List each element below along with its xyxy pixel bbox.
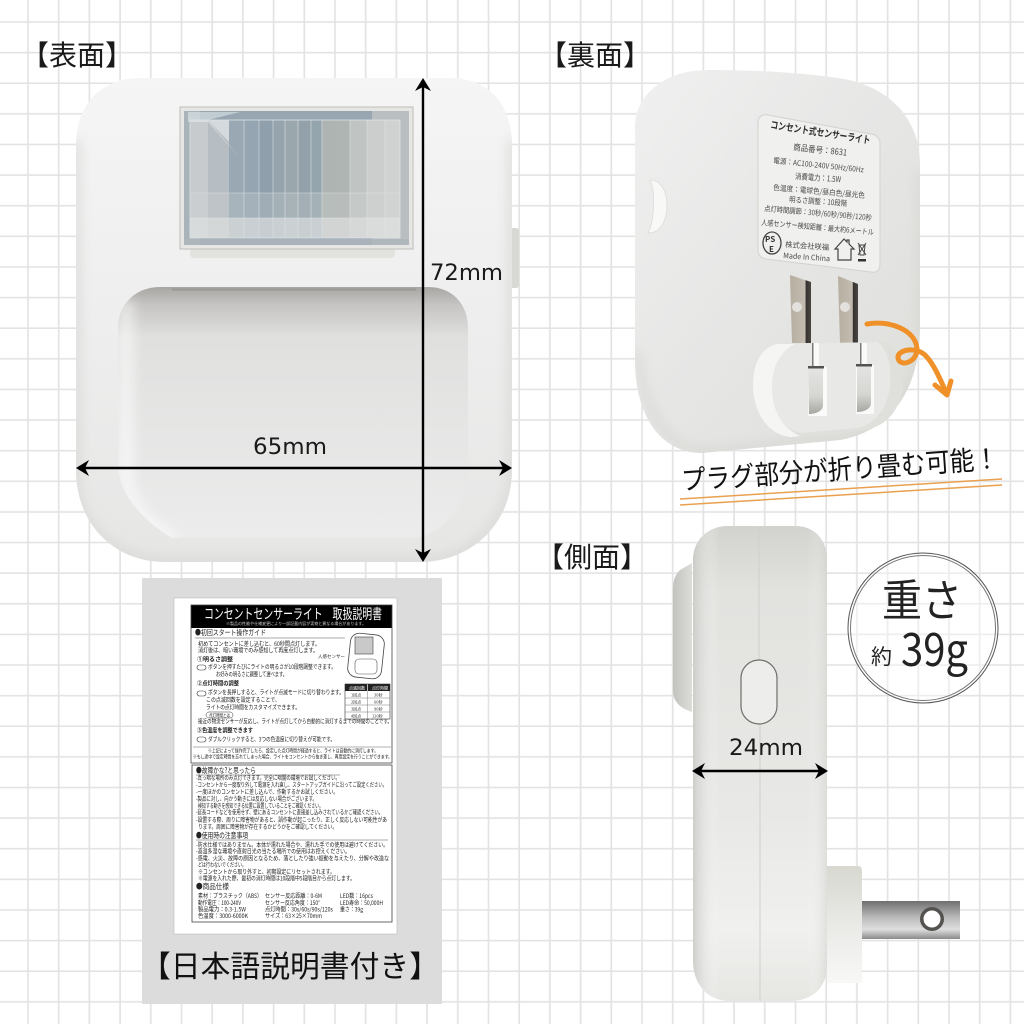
spec label: 株式会社咲福: [785, 239, 830, 253]
icon: crossed-out bin: [858, 243, 866, 262]
arrow: plug folds: [867, 323, 951, 395]
panel: back view of sensor light: [635, 70, 951, 454]
manual timing table: 120秒: [372, 712, 383, 720]
manual timing table: 点灯時間: [372, 684, 388, 692]
manual paper: [174, 598, 397, 934]
manual quick-start section: この点滅回数を設定することで、: [206, 695, 280, 704]
sensor bump: [673, 563, 692, 712]
manual troubleshooting and cautions: -防水仕様ではありません。本体が濡れた場合や、濡れた手での使用は避けてください。: [196, 840, 388, 849]
callout: weight badge: 約: [871, 641, 892, 671]
panel: side view of sensor light: [673, 526, 960, 1001]
manual troubleshooting and cautions: [192, 765, 392, 922]
dimension arrow: 65mm width: [76, 460, 512, 476]
manual troubleshooting and cautions: -延長コードなどを使用せず、壁にあるコンセントに直接差し込みされているかご確認ください。: [196, 808, 383, 816]
manual timing table: 1回点: [351, 692, 361, 698]
spec label: 消費電力：1.5W: [795, 171, 841, 185]
manual troubleshooting and cautions: 点灯時間：30s/60s/90s/120s: [265, 904, 333, 914]
dimension arrow: 72mm height: [415, 78, 431, 562]
manual caption: 【日本語説明書付き】: [141, 942, 439, 986]
manual timing table: 90秒: [374, 706, 382, 712]
heading: back: 【裏面】: [539, 34, 651, 74]
manual quick-start section: ボタンを長押しすると、ライトが点滅モードに切り替わります。: [208, 688, 344, 696]
manual troubleshooting and cautions: センサー反応角度：150°: [265, 898, 320, 907]
manual quick-start section: ライトの点灯時間をカスタマイズできます。: [206, 702, 300, 712]
manual timing table: 3回点: [351, 706, 361, 712]
manual quick-start section: ※もし途中で設定時間を忘れてしまった場合、ライトをコンセントから抜き差し、再度設定を行うことができます。: [193, 754, 392, 760]
icon: house: [835, 239, 854, 260]
plug pins: [790, 275, 858, 343]
callout: weight badge: [848, 553, 998, 703]
folding plug recess: [753, 342, 903, 437]
manual troubleshooting and cautions: -設置する際、周りに障害物があると、誤作動が起こったり、正しく反応しない可能性があ: [196, 815, 387, 824]
manual quick-start section: ボタンを押すたびにライトの明るさが10段階調整できます。: [208, 662, 336, 671]
label: 72mm: 72mm: [430, 261, 503, 286]
spec label: Made In China: [783, 250, 830, 264]
manual troubleshooting and cautions: LED寿命：50,000H: [340, 898, 383, 907]
manual troubleshooting and cautions: ●商品仕様: [196, 881, 229, 892]
manual troubleshooting and cautions: ●使用時の注意事項: [196, 830, 248, 841]
manual troubleshooting and cautions: 検知する動きを感知できる位置に設置していることをご確認ください。: [198, 801, 323, 810]
manual quick-start section: 点灯時間とは: [209, 712, 230, 719]
manual quick-start section: ②点灯時間の調整: [197, 678, 239, 688]
spec label: 点灯時間調節：30秒/60秒/90秒/120秒: [764, 203, 873, 223]
manual troubleshooting and cautions: ※電源を入れた際、最初の消灯時間は10段階中5段階目から点灯します。: [198, 874, 355, 882]
front recess: [118, 287, 468, 540]
manual troubleshooting and cautions: どは行わないでください。: [198, 860, 246, 869]
dimension arrow: 24mm: [692, 763, 828, 779]
manual troubleshooting and cautions: -コンセントから一度取り外して電源を入れ直し、スタートアップガイドに沿ってご設定ください。: [196, 780, 387, 789]
icon: PSE mark: E: [769, 244, 774, 255]
panel: Japanese manual: [141, 578, 442, 1004]
manual troubleshooting and cautions: 重さ：39g: [340, 904, 364, 914]
label: 65mm: 65mm: [253, 435, 327, 460]
callout: weight badge: 重さ: [882, 565, 962, 629]
side button on front view: [508, 228, 519, 288]
manual troubleshooting and cautions: LED数：16pcs: [340, 891, 373, 900]
callout: foldable plug: プラグ部分が折り畳む可能！: [680, 437, 1000, 498]
label: 24mm: 24mm: [729, 736, 803, 761]
back body: [635, 70, 920, 453]
spec label: コンセント式センサーライト: [770, 116, 872, 147]
manual troubleshooting and cautions: -真っ暗な場所のみ点灯できます。完全に暗闇の環境でお試しください。: [196, 773, 340, 782]
spec label: [758, 115, 880, 272]
manual troubleshooting and cautions: -感電、火災、故障の原因となるため、落としたり強い振動を与えたり、分解や改造な: [196, 854, 389, 862]
manual timing table: [345, 684, 390, 720]
icon: PSE mark: [763, 232, 781, 255]
manual troubleshooting and cautions: 色温度：3000-6000K: [198, 911, 248, 920]
manual troubleshooting and cautions: -一度ほかのコンセントに差し込んで、作動するかお試しください。: [196, 787, 338, 796]
heading: side: 【側面】: [536, 536, 648, 576]
manual timing table: 点滅回数: [349, 684, 365, 692]
manual troubleshooting and cautions: 素材：プラスチック（ABS）: [198, 891, 262, 900]
manual troubleshooting and cautions: サイズ：63×25×70mm: [265, 911, 322, 920]
manual timing table: 4回点: [351, 712, 361, 720]
manual quick-start section: ●初回スタート操作ガイド: [195, 627, 266, 638]
manual troubleshooting and cautions: ●故障かな?と思ったら: [196, 765, 256, 776]
manual quick-start section: 消灯後は、暗い環境でのみ感知して再度点灯します。: [198, 646, 318, 654]
manual grey backing: [142, 578, 442, 1004]
manual thumbnail: sensor light: [318, 632, 385, 680]
manual quick-start section: お好みの明るさに調整して選べます。: [216, 670, 287, 678]
manual troubleshooting and cautions: -製品に対し、向かう動きには反応しない場合がございます。: [196, 794, 317, 803]
manual troubleshooting and cautions: ※コンセントから取り外すと、初期設定にリセットされます。: [198, 867, 335, 876]
side button: [741, 660, 777, 724]
manual quick-start section: ③色温度を調整できます: [197, 726, 253, 734]
panel: front view of sensor light: [76, 78, 519, 562]
spec label: 電源：AC100-240V 50Hz/60Hz: [773, 155, 865, 176]
manual quick-start section: 接近の物流センサーが反応し、ライトが点灯してから自動的に消灯するまでの時間のことです。: [198, 716, 392, 726]
spec label: 商品番号：8631: [793, 141, 848, 159]
manual quick-start section: ①明るさ調整: [197, 654, 233, 664]
spec label: 人感センサー検知距離：最大約6メートル: [761, 217, 875, 238]
plug blade: [862, 901, 960, 939]
manual troubleshooting and cautions: 製品電力：0.3-1.5W: [198, 904, 247, 914]
manual quick-start section: ※上記によって操作完了したら、設定した点灯時間が経過すると、ライトは自動的に消灯します。: [208, 748, 378, 754]
manual title bar: [191, 604, 392, 628]
manual title bar: ※製品の性能や仕様変更により一部記載内容が実物と異なる場合があります。: [226, 620, 366, 627]
manual timing table: 2回点: [351, 698, 361, 706]
spec label: 明るさ調整：10段階: [789, 194, 848, 209]
callout: weight badge: 39g: [901, 614, 968, 679]
spec label: 色温度：電球色/昼白色/昼光色: [773, 182, 866, 201]
manual troubleshooting and cautions: ります。周囲に障害物が存在するかどうかをご確認してください。: [198, 822, 337, 831]
front body: [76, 78, 512, 562]
icon: PSE mark: PS: [765, 234, 775, 245]
side body: [693, 526, 827, 1001]
manual quick-start section: [191, 605, 392, 763]
manual quick-start section: ダブルクリックすると、3つの色温度に切り替えが可能です。: [208, 734, 335, 744]
manual timing table: 30秒: [374, 692, 382, 698]
side switch on back: [648, 180, 667, 233]
manual troubleshooting and cautions: -高温多湿な環境や直射日光の当たる場所での使用はお控えください。: [196, 846, 350, 856]
manual quick-start section: 初めてコンセントに差し込むと、60秒間点灯します。: [198, 639, 320, 648]
plug base: [827, 866, 862, 983]
manual timing table: 60秒: [374, 698, 382, 706]
manual title bar: コンセントセンサーライト 取扱説明書: [204, 604, 382, 624]
manual thumbnail: sensor light: 人感センサー: [318, 653, 345, 660]
manual troubleshooting and cautions: センサー反応距離：0-6M: [265, 891, 322, 900]
motion sensor window: [180, 107, 413, 258]
heading: front: 【表面】: [21, 34, 133, 74]
manual troubleshooting and cautions: 動作電圧：100-240V: [198, 898, 241, 907]
